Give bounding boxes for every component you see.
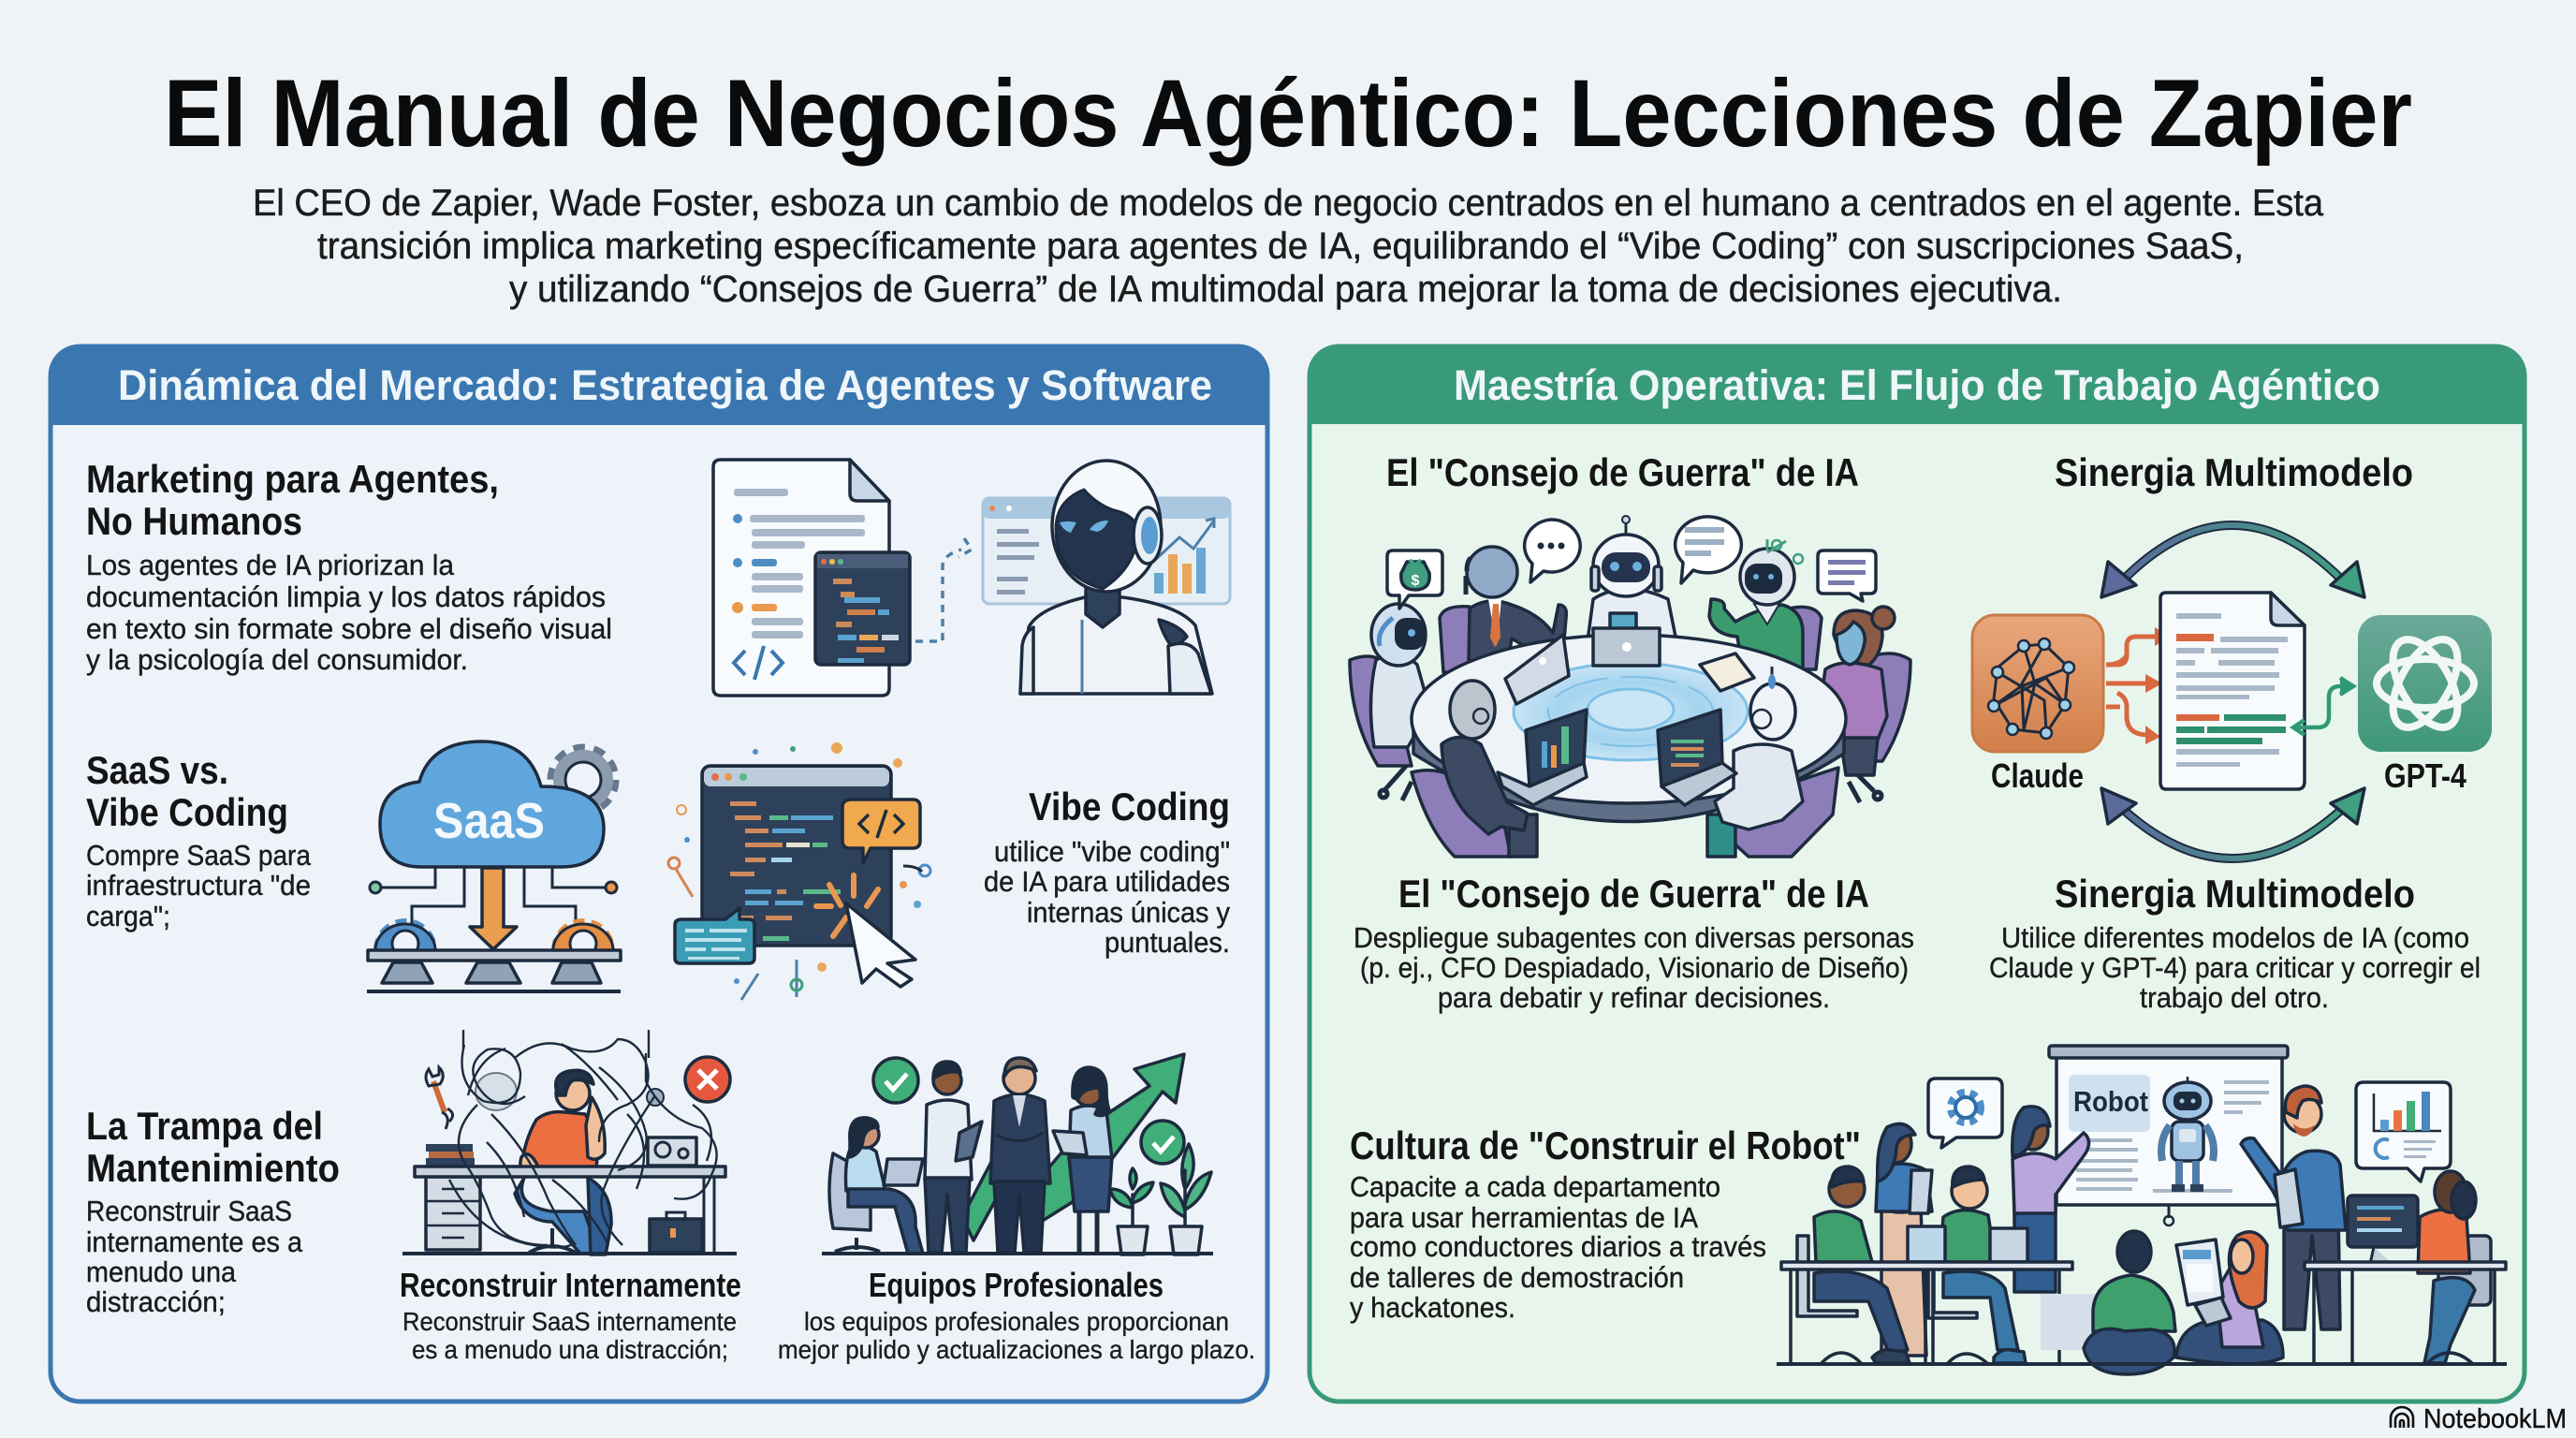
icon: robot agent — [1020, 461, 1212, 694]
text: war council — [1354, 872, 1914, 1014]
icon: GPT node — [2358, 615, 2492, 752]
icon: professional team — [822, 1054, 1213, 1255]
text: build the robot culture — [1350, 1123, 1861, 1324]
arrow: document to GPT — [2293, 678, 2353, 735]
text: build the robot culture: Capacite a cada departamento — [1350, 1170, 1720, 1203]
seated woman — [829, 1118, 923, 1254]
man in suit — [990, 1058, 1050, 1253]
text: marketing for agents — [86, 457, 612, 676]
title: El Manual de Negocios Agéntico: Lecciones de Zapier — [164, 60, 2412, 167]
text: rebuilding internally: es a menudo una distracción; — [412, 1335, 728, 1364]
text: maintenance trap: distracción; — [86, 1285, 226, 1318]
check badge two — [1141, 1121, 1184, 1164]
arrows: Claude to document — [2106, 637, 2162, 735]
wrench — [426, 1067, 453, 1129]
back laptops — [1505, 628, 1660, 704]
arrow: top cycle — [2101, 525, 2364, 597]
presentation board — [2049, 1046, 2288, 1225]
text: synergy: Utilice diferentes modelos de IA (como — [2001, 921, 2469, 954]
text: maintenance trap: menudo una — [86, 1255, 237, 1288]
text: SaaS vs vibe coding: Vibe Coding — [86, 790, 288, 834]
text: vibe coding: puntuales. — [1105, 926, 1230, 959]
subtitle text block: transición implica marketing específicamente para agentes de IA, equilibrando el “Vibe Coding” con suscripciones SaaS, — [317, 226, 2244, 267]
text: build the robot culture: Cultura de "Construir el Robot" — [1350, 1123, 1861, 1167]
icon: SaaS cloud: SaaS — [433, 793, 545, 849]
text: war council: (p. ej., CFO Despiadado, Visionario de Diseño) — [1360, 951, 1909, 984]
standing man — [925, 1062, 982, 1253]
right person with monitor — [2348, 1171, 2491, 1363]
text: maintenance trap: internamente es a — [86, 1225, 303, 1258]
icon: dashboard behind robot — [983, 498, 1230, 604]
standing woman — [1053, 1067, 1112, 1253]
arrow: document to agent — [915, 538, 972, 641]
panel heading: Dinámica del Mercado: Estrategia de Agentes y Software — [118, 361, 1212, 409]
illustration: robot workshop — [1777, 1046, 2507, 1374]
illustration: multi-model synergy — [1972, 525, 2492, 858]
text: marketing for agents: No Humanos — [86, 499, 302, 543]
text: synergy: trabajo del otro. — [2140, 981, 2329, 1014]
text: marketing for agents: Los agentes de IA priorizan la — [86, 549, 455, 581]
panel header bar — [1308, 345, 2526, 424]
text: build the robot culture: de talleres de demostración — [1350, 1261, 1684, 1294]
text: SaaS vs vibe coding: Compre SaaS para — [86, 839, 312, 872]
left robot — [1370, 604, 1449, 747]
central robot — [1586, 516, 1679, 655]
text: professional teams: Equipos Profesionales — [869, 1266, 1164, 1304]
text: maintenance trap: Reconstruir SaaS — [86, 1195, 292, 1227]
panel header bar — [49, 345, 1269, 425]
text: synergy: Sinergia Multimodelo — [2055, 872, 2415, 916]
front-left figure — [1412, 681, 1537, 857]
text: marketing for agents: documentación limpia y los datos rápidos — [86, 580, 606, 613]
floor pair — [2041, 1231, 2283, 1374]
standing woman in blue — [1876, 1123, 1932, 1356]
back chairs — [1350, 607, 1910, 766]
text: war council: El "Consejo de Guerra" de IA — [1398, 872, 1869, 916]
presenter — [2241, 1086, 2346, 1329]
text: SaaS vs vibe coding: carga"; — [86, 900, 170, 932]
icon: vibe coding window — [668, 742, 930, 1000]
speech bubbles — [1387, 517, 1876, 609]
board robot — [2161, 1077, 2214, 1192]
speech bubbles: $ — [1412, 573, 1420, 589]
growth arrow — [962, 1054, 1184, 1240]
advisor with bun — [1811, 607, 1895, 775]
text: professional teams — [778, 1266, 1255, 1364]
front-right figure — [1707, 667, 1838, 857]
arrow: bottom cycle — [2101, 788, 2364, 858]
icon: reviewed document — [2160, 593, 2305, 789]
illustration: AI council round table — [1350, 516, 1910, 857]
advisor in suit — [1466, 547, 1566, 661]
text: SaaS vs vibe coding — [86, 748, 312, 932]
text: maintenance trap: La Trampa del — [86, 1104, 323, 1148]
text: rebuilding internally — [400, 1266, 741, 1364]
text: vibe coding: Vibe Coding — [1029, 785, 1230, 829]
text: vibe coding — [984, 785, 1230, 959]
standing woman in purple — [2012, 1107, 2089, 1292]
text: vibe coding: internas únicas y — [1027, 896, 1230, 929]
text: vibe coding: de IA para utilidades — [984, 865, 1230, 898]
panel: operational mastery — [1308, 345, 2526, 1401]
text: war council: Despliegue subagentes con diversas personas — [1354, 921, 1914, 954]
text: rebuilding internally: Reconstruir SaaS internamente — [402, 1307, 737, 1336]
icon: Claude node — [1972, 615, 2103, 752]
icon: document with code — [713, 460, 910, 696]
text: synergy — [1989, 872, 2481, 1014]
heading: AI war council: El "Consejo de Guerra" de IA — [1386, 450, 1859, 494]
text: build the robot culture: y hackatones. — [1350, 1291, 1515, 1324]
text: SaaS vs vibe coding: SaaS vs. — [86, 748, 228, 792]
text: rebuilding internally: Reconstruir Internamente — [400, 1266, 741, 1304]
subtitle text block — [253, 183, 2324, 310]
bubble: chart — [2356, 1082, 2451, 1181]
bubble: gear — [1928, 1078, 2002, 1148]
gear behind cloud — [554, 751, 612, 809]
right table — [2305, 1262, 2506, 1364]
front laptops — [1498, 710, 1736, 805]
check badge one — [873, 1058, 918, 1103]
subtitle text block: El CEO de Zapier, Wade Foster, esboza un cambio de modelos de negocio centrados en el humano a centrados en el agente. Esta — [253, 183, 2324, 224]
text: build the robot culture: para usar herramientas de IA — [1350, 1201, 1698, 1234]
text: SaaS vs vibe coding: infraestructura "de — [86, 869, 311, 902]
icon: SaaS cloud — [367, 741, 621, 991]
logo: NotebookLM: NotebookLM — [2423, 1404, 2567, 1434]
text: professional teams: mejor pulido y actualizaciones a largo plazo. — [778, 1335, 1255, 1364]
text: marketing for agents: Marketing para Agentes, — [86, 457, 499, 501]
text: professional teams: los equipos profesionales proporcionan — [804, 1307, 1229, 1336]
text: maintenance trap: Mantenimiento — [86, 1146, 340, 1190]
text: war council: para debatir y refinar decisiones. — [1438, 981, 1830, 1014]
potted plants — [1110, 1144, 1211, 1255]
icon: developer tangled in maintenance — [402, 1030, 737, 1255]
panel: market dynamics — [49, 345, 1269, 1401]
round table — [1412, 635, 1846, 822]
text: marketing for agents: en texto sin formate sobre el diseño visual — [86, 612, 612, 645]
left table — [1781, 1262, 2072, 1364]
text: maintenance trap — [86, 1104, 340, 1318]
text: synergy: Claude y GPT-4) para criticar y corregir el — [1989, 951, 2481, 984]
papers on table — [1700, 653, 1754, 691]
panel background — [1310, 346, 2525, 1401]
text: marketing for agents: y la psicología del consumidor. — [86, 643, 468, 676]
subtitle text block: y utilizando “Consejos de Guerra” de IA multimodal para mejorar la toma de decisiones ejecutiva. — [509, 269, 2062, 310]
label: Claude: Claude — [1991, 756, 2084, 795]
panel heading: Maestría Operativa: El Flujo de Trabajo Agéntico — [1454, 361, 2380, 409]
text: build the robot culture: como conductores diarios a través — [1350, 1230, 1766, 1263]
heading: multi-model synergy: Sinergia Multimodelo — [2055, 450, 2413, 494]
label: GPT-4: GPT-4 — [2384, 756, 2466, 795]
chair bases — [1380, 763, 1881, 802]
presentation board: Robot — [2073, 1085, 2148, 1118]
tangled cables — [449, 1030, 717, 1247]
left table seated pair — [1797, 1167, 2027, 1363]
advisor in green — [1709, 539, 1803, 670]
text: vibe coding: utilice "vibe coding" — [994, 835, 1230, 868]
panel background — [51, 346, 1267, 1401]
